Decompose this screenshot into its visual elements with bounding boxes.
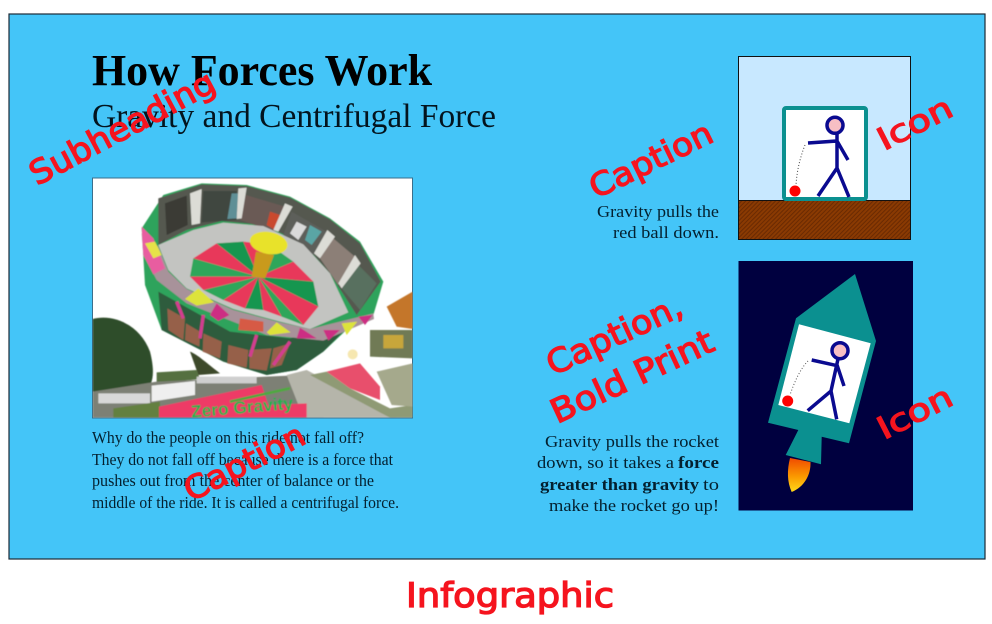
subtitle: Gravity and Centrifugal Force [92,98,496,135]
caption: centrifugal force: They do not fall off because there is a force that [92,450,393,469]
photo: lower rim lights [142,233,374,341]
label: Icon lower: Icon [871,379,959,447]
photo: rider highlights [227,193,238,219]
caption: centrifugal force: middle of the ride. It is called a centrifugal force. [92,493,399,512]
caption: centrifugal force: Why do the people on this ride not fall off? [92,428,364,447]
photo: center pole and yellow cap [252,252,274,278]
icon: stick figure in a rocket [738,261,913,510]
caption: rocket with bold print [537,432,719,515]
photo: trees [93,318,153,392]
caption: rocket with bold print: Gravity pulls the rocket [545,432,719,451]
label: Bold Print: Bold Print [544,322,720,431]
title: How Forces Work [92,46,433,95]
caption: rocket with bold print: greater than gravity [540,475,700,494]
caption: red ball: red ball down. [613,223,719,242]
label: Infographic: Infographic [406,576,614,616]
caption: rocket with bold print: down, so it takes a [537,453,675,472]
photo: silver floor [158,223,348,329]
caption: red ball [597,202,719,242]
label: Caption over photo text: Caption [177,416,311,509]
caption: red ball: Gravity pulls the [597,202,719,221]
caption: rocket with bold print: to [703,475,719,494]
photo: ride outer hull [142,183,383,375]
label: Subheading: Subheading [22,62,222,193]
photo: spinning disc sectors [190,242,318,325]
photo: hull gondolas [167,308,290,371]
caption: rocket with bold print: make the rocket go up! [549,496,719,515]
caption: centrifugal force: pushes out from the center of balance or the [92,471,374,490]
photo: parking lot and ground [92,375,298,418]
caption: rocket with bold print: force [678,453,719,472]
photo: rider windows [165,196,188,235]
label: Caption comma: Caption, [540,286,689,383]
photo: upper rim band [158,184,381,315]
label: Caption upper right: Caption [583,114,719,206]
photo: spinning carnival ride: Zero Gravity [190,393,294,422]
photo: red banner [159,385,307,418]
photo: background carnival ride [387,292,413,329]
caption: centrifugal force [92,428,399,512]
icon: stick figure dropping a ball in a room [738,56,910,240]
photo: spinning carnival ride [92,178,413,422]
photo: stairs and right ground [287,370,397,418]
label: Icon upper: Icon [871,90,959,158]
